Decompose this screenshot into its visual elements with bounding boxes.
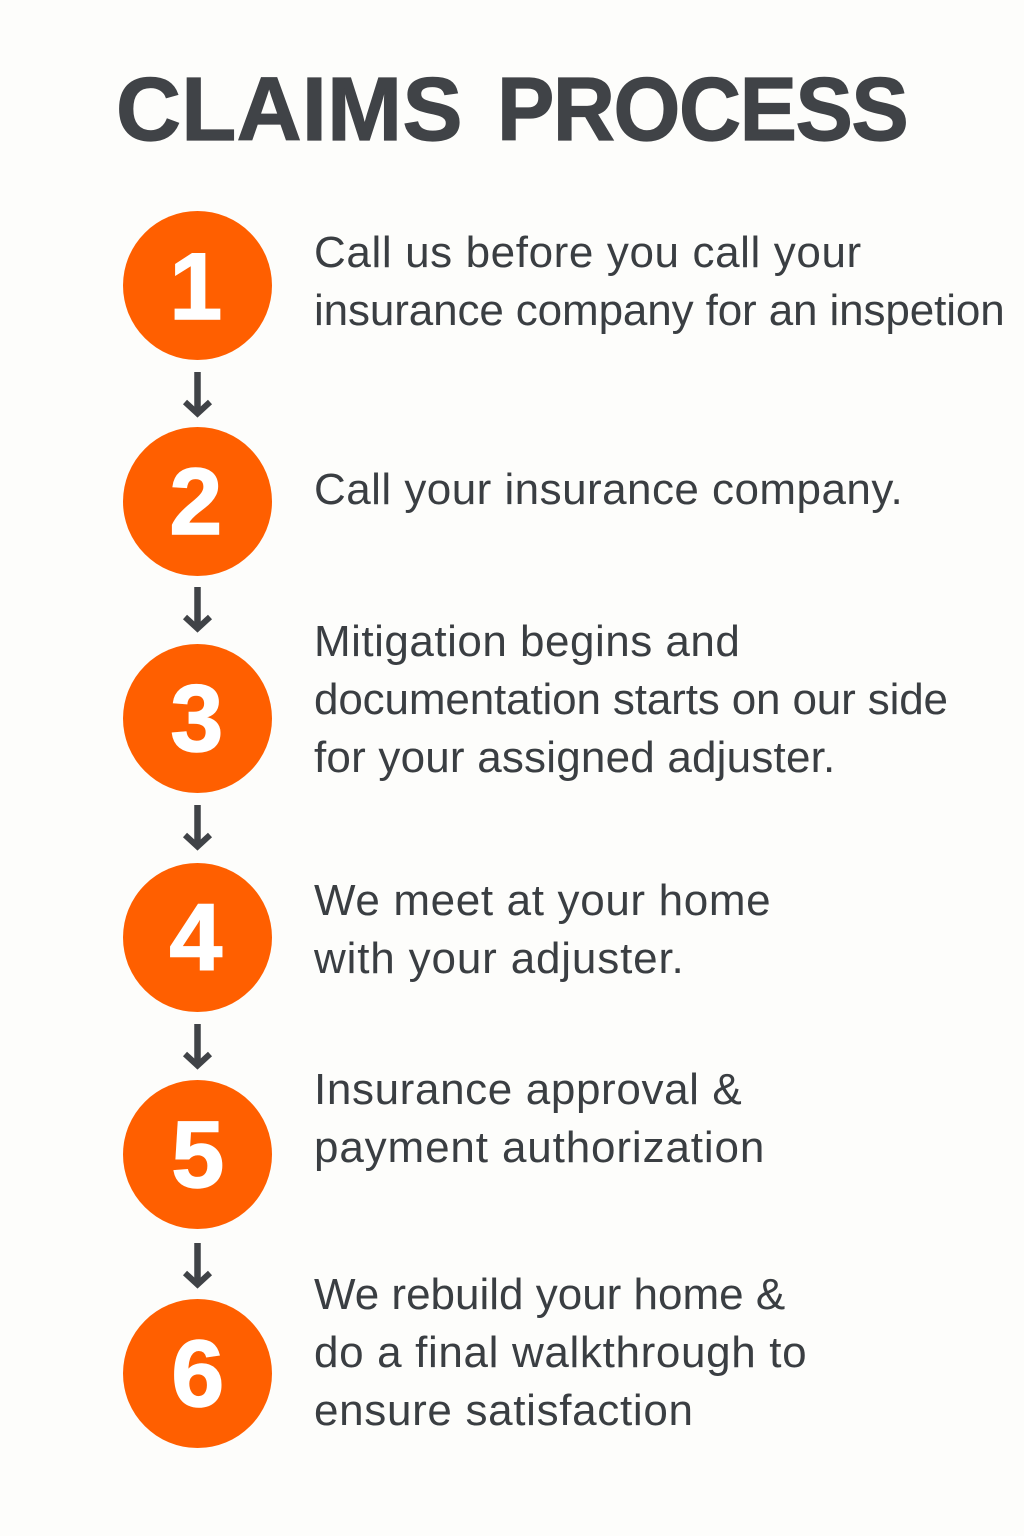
title: CLAIMS	[116, 60, 463, 160]
step 2 text: Call your insurance company.	[314, 465, 903, 514]
step 6 text: We rebuild your home &	[314, 1270, 785, 1319]
step 5 text: Insurance approval &	[314, 1065, 742, 1114]
step 6 text: do a final walkthrough to	[314, 1328, 807, 1377]
step 3 text: Mitigation begins and	[314, 617, 740, 666]
step 1 text: Call us before you call your	[314, 228, 862, 277]
step 4 number circle	[123, 863, 272, 1012]
step 5 text	[314, 1065, 765, 1172]
step 1 number circle	[123, 211, 272, 360]
step 2 number circle: 2	[169, 449, 222, 555]
step 6 text	[314, 1270, 807, 1435]
arrow 5 to 6	[183, 1243, 212, 1288]
step 3 text: documentation starts on our side	[314, 675, 948, 724]
step 6 number circle	[123, 1299, 272, 1448]
step 6 text: ensure satisfaction	[314, 1386, 694, 1435]
arrow 4 to 5	[183, 1024, 212, 1070]
step 1 text: insurance company for an inspetion	[314, 286, 1005, 335]
step 1 number circle: 1	[169, 234, 222, 340]
title	[116, 60, 907, 160]
arrow 2 to 3	[183, 587, 212, 632]
step 4 text: with your adjuster.	[314, 934, 685, 983]
step 4 text	[314, 876, 771, 983]
step 5 number circle: 5	[171, 1102, 224, 1208]
arrow 3 to 4	[183, 805, 212, 850]
step 3 text	[314, 617, 948, 782]
step 3 number circle	[123, 644, 272, 793]
step 4 number circle: 4	[169, 885, 222, 991]
step 3 number circle: 3	[170, 666, 223, 772]
step 1 text	[314, 228, 1005, 335]
step 3 text: for your assigned adjuster.	[314, 733, 835, 782]
step 5 number circle	[123, 1080, 272, 1229]
step 5 text: payment authorization	[314, 1123, 765, 1172]
step 2 number circle	[123, 427, 272, 576]
step 4 text: We meet at your home	[314, 876, 771, 925]
arrow 1 to 2	[183, 372, 212, 418]
step 6 number circle: 6	[171, 1321, 224, 1427]
title: PROCESS	[497, 60, 907, 160]
